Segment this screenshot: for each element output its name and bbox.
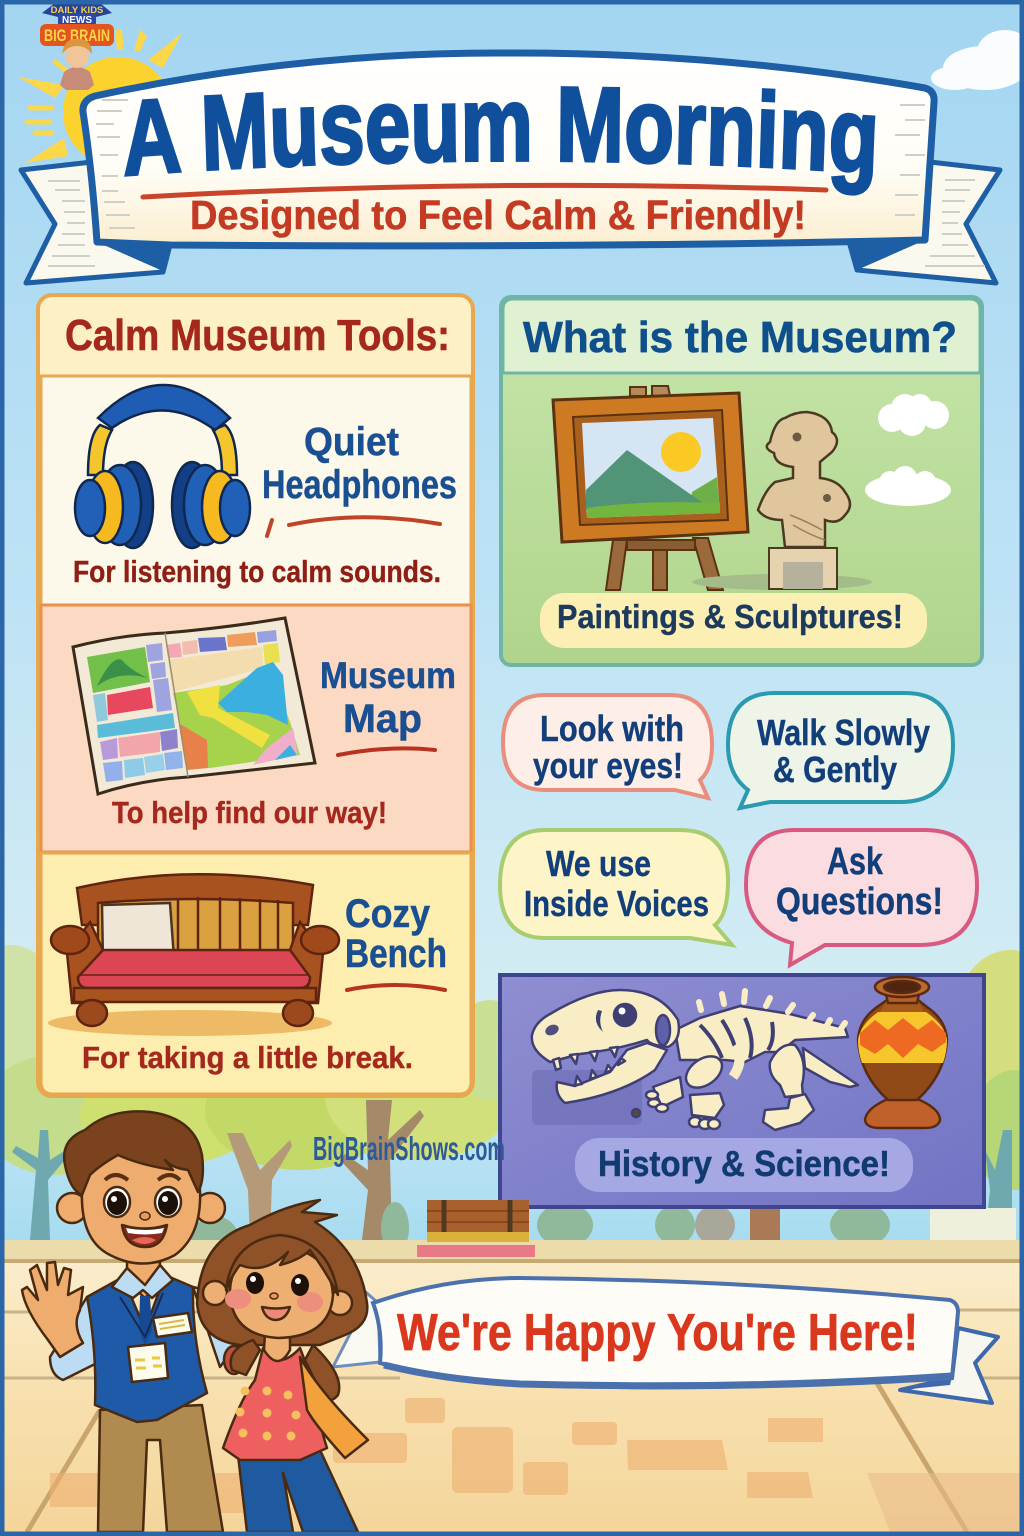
speech bubble: walk slowly and gently: Walk Slowly [757, 712, 930, 753]
character: girl [197, 1200, 368, 1532]
speech bubble: walk slowly and gently: & Gently [773, 749, 897, 790]
icon: clouds [865, 394, 951, 506]
banner body [83, 53, 934, 246]
speech bubble: we use inside voices: We use [546, 843, 651, 884]
ribbon text: We're Happy You're Here! [397, 1304, 918, 1362]
panel: history and science [500, 975, 984, 1207]
pill: paintings and sculptures: Paintings & Sculptures! [557, 598, 903, 635]
speech bubble: ask questions [746, 830, 977, 965]
logo badge: BIG BRAIN [44, 26, 110, 45]
icon: headphones [75, 385, 250, 548]
title: A Museum Morning [124, 86, 876, 196]
logo badge: NEWS [62, 15, 92, 26]
ribbon body [373, 1278, 958, 1387]
logo badge [40, 3, 114, 46]
speech bubble: look with your eyes: your eyes! [533, 745, 683, 786]
caption: For taking a little break. [82, 1040, 413, 1075]
label: quiet headphones: Headphones [262, 463, 457, 507]
underline [338, 748, 435, 755]
logo [40, 3, 114, 90]
icon: sculpture [692, 412, 872, 590]
pill: paintings and sculptures [540, 593, 927, 648]
speech bubble: we use inside voices [500, 830, 732, 945]
caption: For listening to calm sounds. [73, 554, 441, 589]
label: museum map [320, 655, 456, 741]
pill: history and science: History & Science! [598, 1143, 890, 1184]
subtitle: Designed to Feel Calm & Friendly! [190, 192, 806, 238]
row: quiet headphones [41, 376, 471, 605]
label: cozy bench [345, 892, 447, 976]
icon: vase [858, 977, 947, 1128]
icon: clouds [931, 30, 1024, 90]
row: cozy bench [41, 853, 471, 1094]
label: museum map: Museum [320, 655, 456, 696]
row: museum map [41, 605, 471, 852]
heading: calm museum tools: Calm Museum Tools: [65, 311, 450, 360]
website label: BigBrainShows.com [313, 1130, 505, 1167]
logo mascot [60, 39, 94, 90]
icon: bench [48, 874, 339, 1036]
icon: painting on easel [553, 386, 748, 590]
label: museum map: Map [343, 697, 422, 741]
icon: map [73, 618, 315, 794]
icon: park bench [417, 1200, 535, 1257]
label: quiet headphones [262, 420, 457, 507]
caption: To help find our way! [112, 795, 387, 830]
heading: what is the museum: What is the Museum? [523, 313, 957, 362]
speech bubble: ask questions: Ask [827, 841, 884, 883]
speech bubble: walk slowly and gently [728, 693, 953, 808]
speech bubble: we use inside voices: Inside Voices [524, 883, 709, 924]
underline [347, 985, 445, 990]
icon: sun [18, 30, 182, 167]
label: cozy bench: Bench [345, 932, 447, 976]
panel: calm museum tools [38, 295, 473, 1096]
speech bubble: look with your eyes: Look with [540, 708, 684, 749]
welcome ribbon [333, 1278, 998, 1403]
underline [267, 517, 440, 536]
speech bubble: ask questions: Questions! [776, 881, 943, 923]
label: quiet headphones: Quiet [304, 420, 399, 464]
character: museum guide [22, 1111, 244, 1532]
subtitle rule [143, 185, 826, 197]
icon: dinosaur skeleton [532, 990, 858, 1130]
logo badge: DAILY KIDS [51, 5, 103, 16]
panel: what is the museum [501, 297, 982, 665]
panel header [503, 299, 980, 373]
label: cozy bench: Cozy [345, 892, 431, 936]
ribbon tails [333, 1287, 998, 1403]
banner tails [21, 162, 1000, 283]
title banner [18, 50, 1002, 286]
speech bubble: look with your eyes [503, 695, 712, 798]
